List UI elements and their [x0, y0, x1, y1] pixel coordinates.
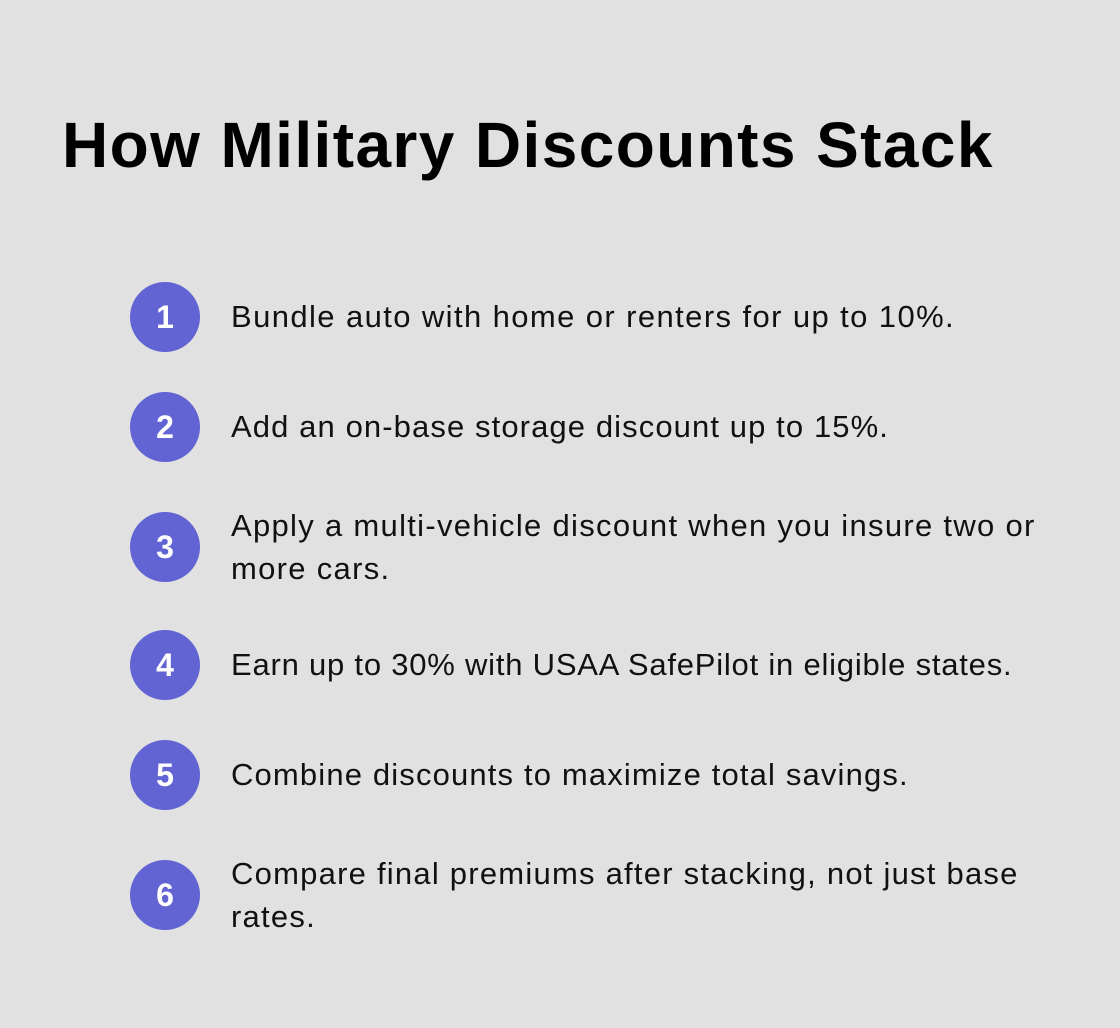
item 3: more cars. [231, 551, 390, 586]
item 5: 5 [156, 757, 174, 793]
item 4: 4 [156, 647, 174, 683]
item 2 [130, 392, 889, 462]
item 6: rates. [231, 899, 316, 934]
item 6: 6 [156, 877, 174, 913]
item 4 [130, 630, 1012, 700]
item 5 [130, 740, 909, 810]
item 6: Compare final premiums after stacking, not just base [231, 856, 1019, 891]
item 2: 2 [156, 409, 174, 445]
title: How Military Discounts Stack [62, 109, 994, 181]
item 6 [130, 856, 1019, 934]
item 2: Add an on-base storage discount up to 15%. [231, 409, 889, 444]
item 4: Earn up to 30% with USAA SafePilot in eligible states. [231, 647, 1012, 682]
item 1: 1 [156, 299, 174, 335]
item 3: Apply a multi-vehicle discount when you insure two or [231, 508, 1036, 543]
item 1 [130, 282, 955, 352]
item 1: Bundle auto with home or renters for up to 10%. [231, 299, 955, 334]
item 3: 3 [156, 529, 174, 565]
item 3 [130, 508, 1036, 586]
item 5: Combine discounts to maximize total savings. [231, 757, 909, 792]
